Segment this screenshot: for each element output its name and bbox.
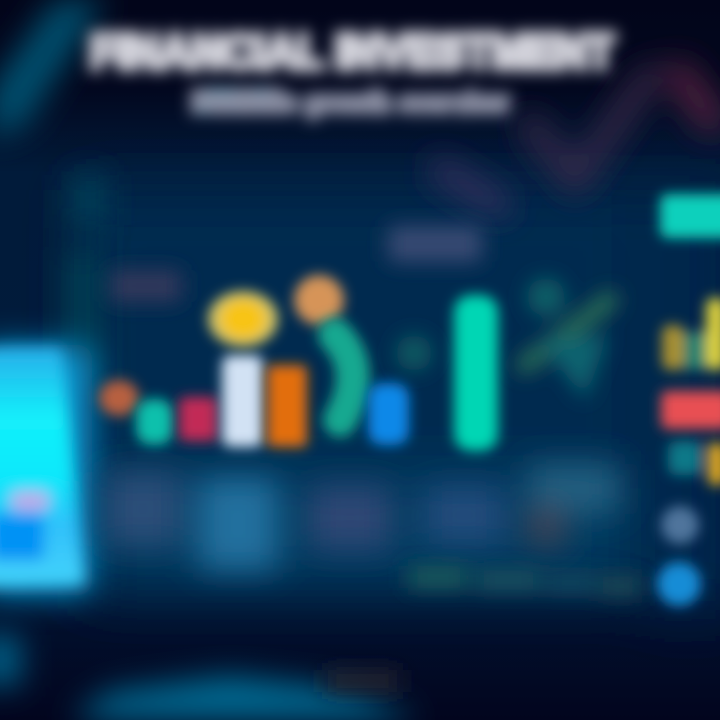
panel: central dashboard glow <box>80 190 720 610</box>
info card 2 <box>198 478 278 570</box>
phone card: blue block <box>0 514 44 560</box>
bar: crimson <box>179 397 217 441</box>
right panel: grey dot <box>661 506 699 544</box>
info cards row <box>104 464 620 570</box>
right panel: teal button <box>660 194 720 238</box>
bar: silver <box>222 355 263 447</box>
subtitle: Portfolio growth overview <box>191 86 510 119</box>
title: FINANCIAL INVESTMENT <box>90 26 614 79</box>
chart label: left <box>108 270 182 302</box>
bar: bright teal <box>454 295 498 451</box>
bar: coin brown <box>99 380 139 416</box>
bar: teal <box>136 399 173 445</box>
chart label: mid-right <box>388 226 482 262</box>
bar: orange <box>267 365 307 447</box>
phone glow <box>0 345 92 595</box>
info card 5 <box>528 464 620 514</box>
phone screen <box>0 348 84 586</box>
scatter chart: dim teal <box>525 278 610 400</box>
gauge arc: teal <box>335 335 353 420</box>
decorative streak: top-left diagonal <box>0 0 105 140</box>
info card 1 <box>104 472 182 546</box>
footer strip <box>408 566 642 596</box>
coin: gold <box>208 291 278 347</box>
bottom dark smudge <box>325 670 400 692</box>
phone card: pink highlight <box>12 492 48 510</box>
info card 3 <box>308 486 392 550</box>
teal accent: left edge of chart <box>70 175 104 380</box>
right panel: red bar <box>661 391 720 429</box>
info card 4 <box>424 486 504 544</box>
bar chart <box>99 275 498 451</box>
right panel: blue dot <box>657 562 701 606</box>
coin: copper <box>294 275 344 325</box>
bottom band <box>0 635 420 720</box>
dot: dark teal <box>396 335 432 371</box>
trend line: top-right arrow <box>440 75 712 205</box>
bar: blue <box>368 383 409 445</box>
right panel: donut chart <box>662 298 720 485</box>
